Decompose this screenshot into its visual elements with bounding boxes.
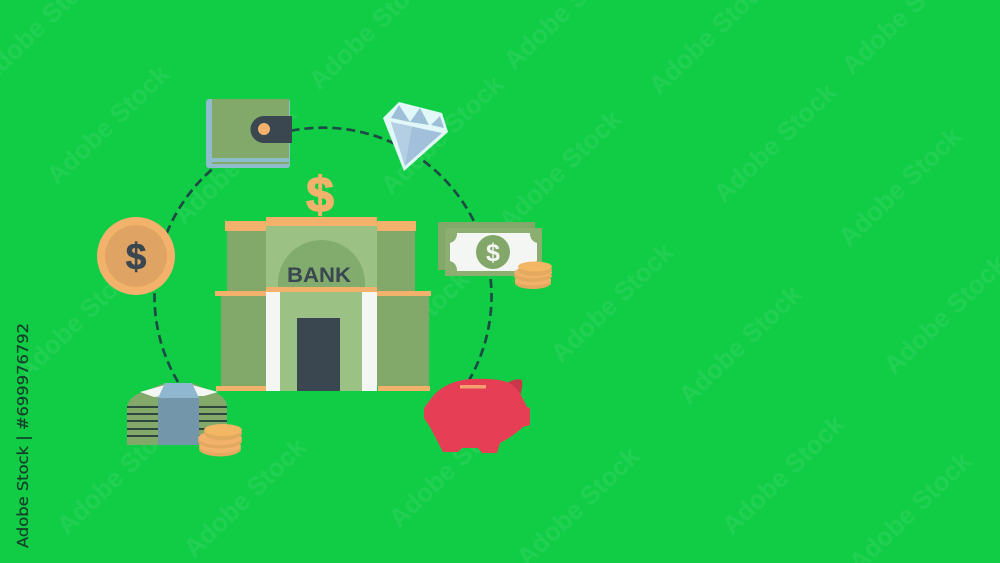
watermark pattern: Adobe Stock <box>41 58 175 190</box>
watermark pattern: Adobe Stock <box>213 228 347 360</box>
icon: gold coin: $ <box>126 236 147 277</box>
icon: banknote with coins: $ <box>486 239 500 267</box>
watermark pattern: Adobe Stock <box>168 98 302 230</box>
stock id watermark: Adobe Stock | #699976792 <box>14 323 32 548</box>
icon: wallet <box>206 99 292 168</box>
watermark pattern: Adobe Stock <box>375 68 509 200</box>
icon: cash stack with coins <box>127 383 242 456</box>
watermark pattern: Adobe Stock <box>833 120 967 252</box>
watermark pattern: Adobe Stock <box>383 401 517 533</box>
bank label: BANK <box>287 264 351 287</box>
icon: dollar sign on bank roof: $ <box>306 167 334 223</box>
watermark pattern: Adobe Stock <box>673 278 807 410</box>
watermark pattern: Adobe Stock <box>545 236 679 368</box>
icon: diamond <box>383 102 448 171</box>
watermark pattern: Adobe Stock <box>11 253 145 385</box>
bank building <box>215 217 431 391</box>
watermark pattern: Adobe Stock <box>341 263 475 395</box>
watermark pattern: Adobe Stock <box>716 408 850 540</box>
watermark pattern: Adobe Stock <box>178 431 312 563</box>
dashed arc connecting icons <box>154 128 492 382</box>
watermark pattern: Adobe Stock <box>51 408 185 540</box>
icon: gold coin <box>97 217 175 295</box>
icon: banknote with coins <box>438 222 552 289</box>
icon: piggy bank <box>424 379 530 453</box>
watermark pattern: Adobe Stock <box>708 76 842 208</box>
watermark pattern: Adobe Stock <box>493 103 627 235</box>
